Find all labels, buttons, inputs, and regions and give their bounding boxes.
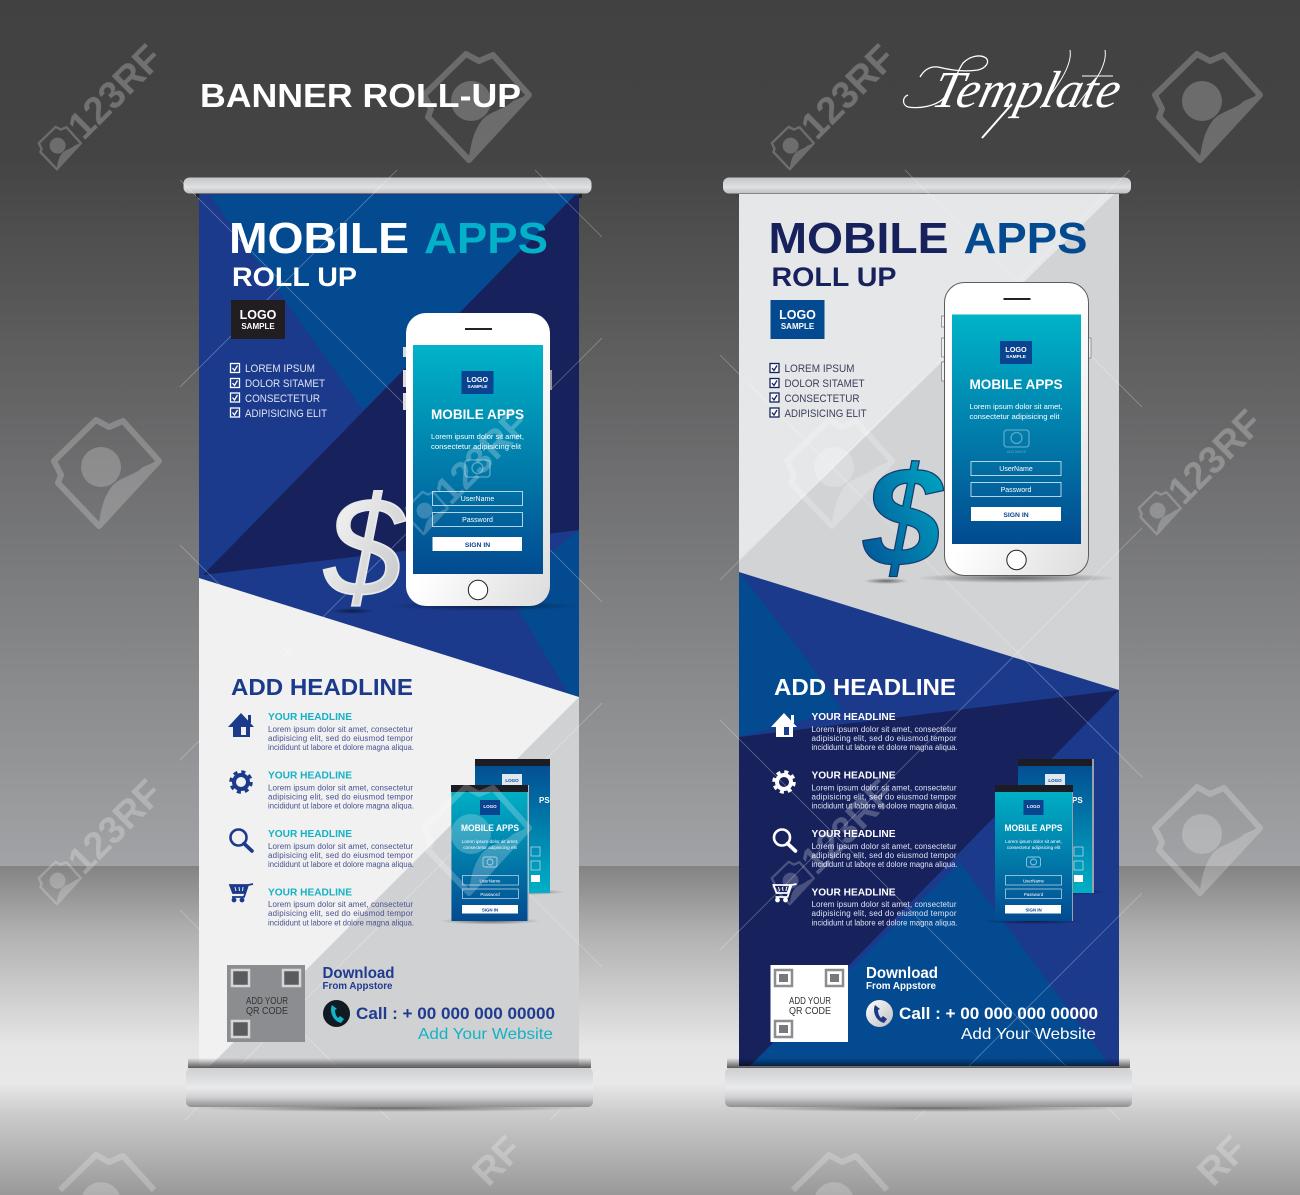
right mini banner: back	[1018, 759, 1108, 895]
left phone call icon	[323, 1000, 350, 1027]
left feature 4 text: adipisicing elit, sed do eiusmod tempor	[268, 909, 413, 918]
right mini banner: front: LOGO	[1027, 804, 1041, 809]
right feature 4 text: YOUR HEADLINE	[812, 886, 896, 898]
watermarks: 123RF logos: 123RF	[60, 37, 171, 148]
left feature 2 text: Lorem ipsum dolor sit amet, consectetur	[268, 784, 413, 792]
right checklist	[770, 363, 867, 420]
left banner top rail	[184, 178, 592, 198]
right checklist: DOLOR SITAMET	[784, 378, 865, 390]
watermarks: 123RF logos: 123RF	[793, 37, 904, 148]
right download text: From Appstore	[866, 981, 936, 992]
right feature 3 text: YOUR HEADLINE	[812, 828, 896, 840]
left feature list	[228, 711, 414, 928]
left phone mockup	[389, 313, 579, 611]
right logo box	[770, 300, 824, 339]
left phone mockup: Password	[462, 517, 493, 524]
right subheading: ROLL UP	[772, 262, 896, 292]
left phone mockup: MOBILE APPS	[431, 406, 524, 422]
right icon: magnifier	[774, 830, 796, 851]
right feature 4 text	[812, 886, 958, 928]
watermarks: egg icons cut by the bottom edge	[60, 1155, 887, 1195]
right bottom roller	[725, 1058, 1132, 1112]
left feature 3 text: Lorem ipsum dolor sit amet, consectetur	[268, 842, 413, 851]
left website text: Add Your Website	[418, 1026, 553, 1043]
right checklist: ADIPISICING ELIT	[784, 408, 867, 420]
left mini banner: front: UserName	[480, 878, 501, 884]
right main heading accent: APPS	[964, 214, 1088, 263]
panel: right roll-up banner	[720, 170, 1142, 1120]
background: studio floor	[0, 866, 1300, 1195]
left feature 2 text: adipisicing elit, sed do eiusmod tempor	[268, 792, 413, 802]
left phone mockup: consectetur adipisicing elit	[431, 442, 522, 451]
right phone mockup	[916, 282, 1116, 583]
left download text	[322, 965, 394, 992]
right feature 3 text	[812, 828, 958, 869]
left feature 3 text: YOUR HEADLINE	[268, 828, 352, 840]
left feature 4 text: incididunt ut labore et dolore magna aliqua.	[268, 918, 414, 928]
left mini banner: back	[475, 759, 565, 895]
left mini banner: front: LOGO	[483, 804, 497, 809]
right logo box: LOGO	[779, 308, 816, 322]
right feature 1 text: incididunt ut labore et dolore magna aliqua.	[812, 743, 958, 752]
right feature 3 text: incididunt ut labore et dolore magna aliqua.	[812, 860, 958, 869]
left mini banner: front: MOBILE APPS	[461, 823, 519, 833]
left feature 3 text	[268, 828, 414, 869]
right feature 2 text: Lorem ipsum dolor sit amet, consectetur	[812, 784, 957, 792]
right feature 1 text: adipisicing elit, sed do eiusmod tempor	[812, 734, 957, 743]
watermarks: 123RF logos: 123RF	[1160, 402, 1271, 513]
left phone mockup: Lorem ipsum dolor sit amet,	[431, 432, 524, 441]
right mini banner: front: consectetur adipisicing elit	[1007, 845, 1061, 850]
left phone mockup: UserName	[461, 496, 494, 503]
watermarks: 123RF logos: RF	[465, 1129, 530, 1194]
right feature 4 text: Lorem ipsum dolor sit amet, consectetur	[812, 900, 957, 909]
left feature 1 text: adipisicing elit, sed do eiusmod tempor	[268, 734, 413, 743]
right QR code placeholder	[770, 965, 848, 1042]
left feature 1 text: incididunt ut labore et dolore magna aliqua.	[268, 743, 414, 752]
left checklist: CONSECTETUR	[245, 393, 320, 405]
left call text: Call : + 00 000 000 00000	[356, 1004, 555, 1023]
right call text: Call : + 00 000 000 00000	[899, 1004, 1098, 1023]
background: studio wall	[0, 0, 1300, 866]
left phone mockup: LOGO	[467, 375, 489, 384]
left QR code placeholder: QR CODE	[246, 1006, 288, 1017]
right feature 2 text: YOUR HEADLINE	[812, 770, 896, 782]
right QR code placeholder: QR CODE	[789, 1006, 831, 1017]
left phone mockup: SIGN IN	[465, 542, 490, 549]
right phone mockup: LOGO	[1005, 345, 1027, 354]
right banner artwork background	[739, 194, 1119, 1066]
right icon: gear	[774, 772, 794, 792]
left checklist: DOLOR SITAMET	[245, 378, 325, 390]
right feature 3 text: adipisicing elit, sed do eiusmod tempor	[812, 851, 957, 860]
left logo box: LOGO	[240, 308, 277, 322]
left download text: From Appstore	[322, 981, 393, 992]
right phone mockup: UserName	[999, 466, 1033, 473]
left feature 2 text: YOUR HEADLINE	[268, 770, 352, 782]
left section heading: ADD HEADLINE	[231, 674, 413, 700]
right phone mockup: Password	[1001, 487, 1031, 494]
left icon: shopping cart	[230, 884, 253, 902]
left QR code placeholder	[227, 965, 305, 1042]
left icon: house	[228, 713, 254, 737]
watermarks: 123RF logos: 123RF	[427, 402, 538, 513]
right feature list	[771, 711, 958, 928]
watermarks: 123RF logos: 123RF	[60, 772, 171, 883]
right mini banner: front: Password	[1024, 892, 1044, 897]
left subheading: ROLL UP	[232, 262, 357, 292]
left mini banner: back: LOGO	[505, 778, 519, 783]
watermarks: egg icons	[39, 54, 1260, 904]
left mini banner: back: PS	[539, 796, 550, 805]
right feature 1 text: YOUR HEADLINE	[812, 711, 896, 723]
right mini banner: back: PS	[1072, 796, 1083, 805]
right icon: house	[771, 713, 797, 737]
right phone mockup: consectetur adipisicing elit	[970, 412, 1060, 421]
left feature 1 text: Lorem ipsum dolor sit amet, consectetur	[268, 725, 413, 734]
right feature 2 text	[812, 770, 958, 810]
left feature 3 text: adipisicing elit, sed do eiusmod tempor	[268, 851, 413, 860]
left feature 1 text: YOUR HEADLINE	[268, 711, 352, 723]
right main heading: MOBILE	[768, 214, 948, 263]
right website text: Add Your Website	[961, 1026, 1096, 1043]
right feature 4 text: adipisicing elit, sed do eiusmod tempor	[812, 909, 957, 918]
left QR code placeholder: ADD YOUR	[246, 996, 288, 1007]
left logo box: SAMPLE	[241, 322, 275, 331]
right mini banner: front	[983, 785, 1083, 924]
right feature 2 text: adipisicing elit, sed do eiusmod tempor	[812, 792, 957, 802]
left main heading accent: APPS	[424, 214, 548, 263]
right phone mockup: MOBILE APPS	[970, 376, 1062, 392]
left mini banner: front	[440, 785, 540, 924]
right phone call icon	[866, 1000, 893, 1027]
left icon: gear	[231, 772, 251, 792]
right banner top rail	[723, 178, 1131, 198]
right section heading: ADD HEADLINE	[774, 674, 956, 700]
right feature 1 text: Lorem ipsum dolor sit amet, consectetur	[812, 725, 957, 734]
right mini banner: back: LOGO	[1048, 778, 1062, 783]
right checklist: CONSECTETUR	[784, 393, 860, 405]
left feature 2 text	[268, 770, 414, 810]
right feature 3 text: Lorem ipsum dolor sit amet, consectetur	[812, 842, 957, 851]
left feature 3 text: incididunt ut labore et dolore magna aliqua.	[268, 860, 414, 869]
script heading: template	[904, 50, 1127, 138]
title: banner roll-up: BANNER ROLL-UP	[200, 78, 521, 115]
right mini banner: front: SIGN IN	[1025, 908, 1042, 912]
right mini banner: front: MOBILE APPS	[1004, 823, 1062, 833]
left feature 1 text	[268, 711, 414, 752]
right phone mockup: ADD IMAGE	[1007, 450, 1027, 454]
left mini banner: front: Password	[480, 892, 500, 897]
right feature 1 text	[812, 711, 958, 752]
left dollar sign: $	[324, 468, 407, 627]
right logo box: SAMPLE	[781, 322, 815, 331]
right icon: shopping cart	[774, 884, 796, 902]
left feature 4 text: YOUR HEADLINE	[268, 886, 352, 898]
left feature 4 text: Lorem ipsum dolor sit amet, consectetur	[268, 900, 413, 909]
left phone mockup: SAMPLE	[468, 384, 488, 390]
panel: left roll-up banner	[180, 170, 602, 1120]
left feature 4 text	[268, 886, 414, 928]
left checklist: LOREM IPSUM	[245, 363, 315, 375]
right download text: Download	[866, 965, 938, 982]
left logo box	[231, 300, 285, 339]
left mini banner: front: SIGN IN	[482, 908, 498, 912]
watermarks: 123RF logos: 123RF	[793, 772, 904, 883]
left mini banner: front: Lorem ipsum dolor sit amet,	[462, 839, 518, 844]
right mini banner: front: UserName	[1023, 878, 1045, 884]
right feature 2 text: incididunt ut labore et dolore magna aliqua.	[812, 802, 958, 810]
left checklist: ADIPISICING ELIT	[245, 408, 327, 420]
left checklist	[230, 363, 327, 420]
script heading: template: Template	[927, 62, 1127, 119]
right phone mockup: Lorem ipsum dolor sit amet,	[970, 402, 1062, 411]
right download text	[866, 965, 938, 992]
left main heading: MOBILE	[229, 214, 409, 263]
right feature 4 text: incididunt ut labore et dolore magna aliqua.	[812, 918, 958, 928]
left icon: magnifier	[230, 830, 252, 851]
right QR code placeholder: ADD YOUR	[789, 996, 831, 1007]
left mini banner: front: consectetur adipisicing elit	[463, 845, 518, 850]
right phone mockup: SAMPLE	[1006, 354, 1027, 360]
watermarks: 123RF logos: RF	[1190, 1129, 1255, 1194]
left banner artwork background	[199, 194, 579, 1066]
right checklist: LOREM IPSUM	[784, 363, 854, 375]
right phone mockup: SIGN IN	[1003, 512, 1029, 519]
left bottom roller	[186, 1058, 593, 1112]
right mini banner: front: Lorem ipsum dolor sit amet,	[1005, 839, 1062, 844]
left download text: Download	[322, 965, 394, 982]
right dollar sign: $	[863, 438, 945, 597]
left feature 2 text: incididunt ut labore et dolore magna aliqua.	[268, 802, 414, 810]
